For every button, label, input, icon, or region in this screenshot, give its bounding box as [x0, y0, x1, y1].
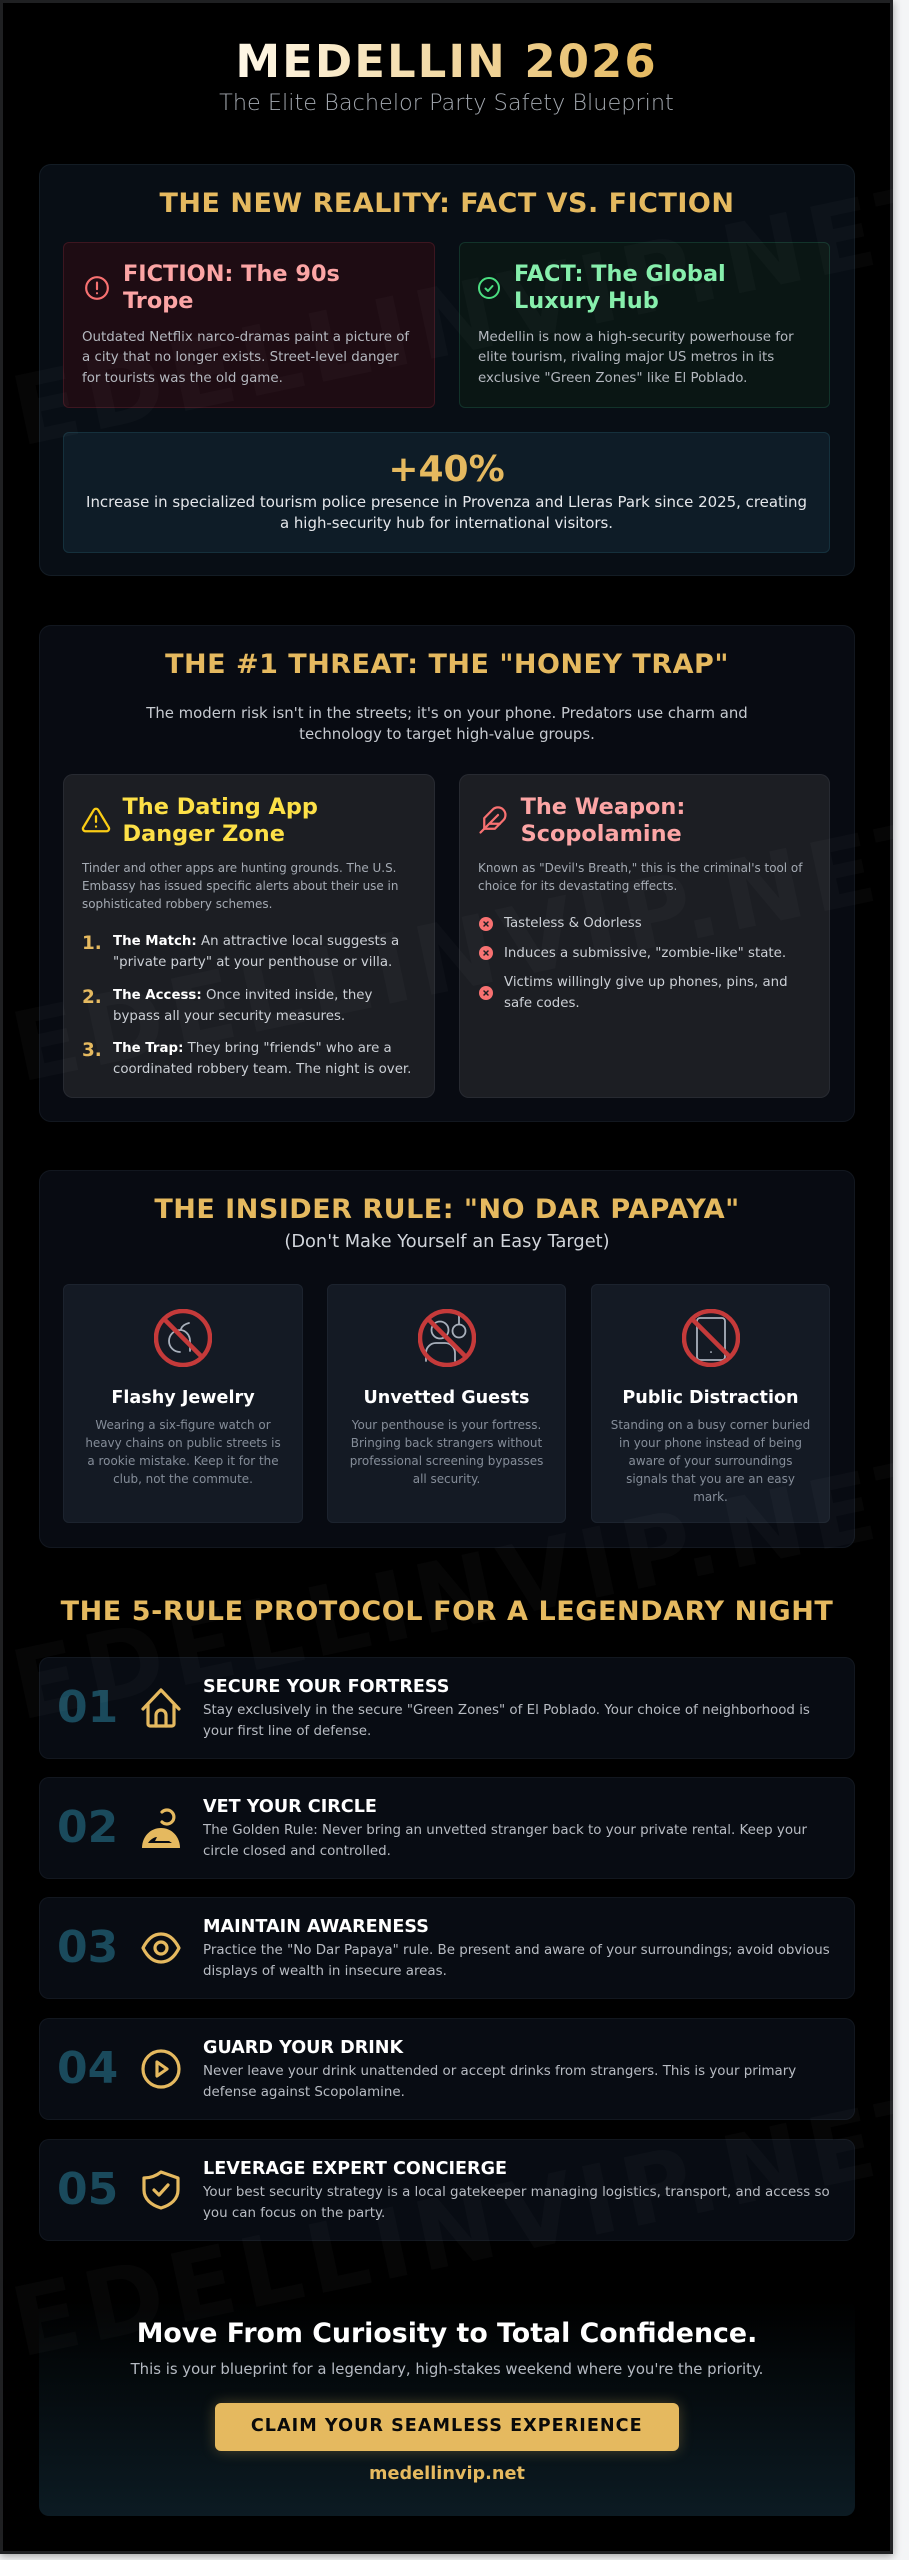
- guests title: Unvetted Guests: [364, 1388, 529, 1408]
- fact heading: [514, 260, 726, 314]
- icon: play circle: [141, 2049, 181, 2089]
- card: scopolamine: [459, 774, 830, 1098]
- fiction text: [82, 330, 410, 386]
- rule 05 text: [203, 2185, 830, 2221]
- distraction text: [611, 1418, 810, 1504]
- icon: person: [142, 1808, 180, 1848]
- card: fact: [459, 242, 830, 408]
- step 1: The Match: An attractive local suggests a: [113, 934, 399, 948]
- panel: no dar papaya: [39, 1170, 855, 1548]
- card: unvetted guests: [327, 1284, 566, 1523]
- rule 01 text: [203, 1703, 810, 1739]
- effect 3: Victims willingly give up phones, pins, and: [504, 975, 788, 990]
- scopolamine text: [478, 861, 803, 893]
- cta button: CLAIM YOUR SEAMLESS EXPERIENCE: [251, 2416, 643, 2436]
- rule 04 text: [203, 2064, 796, 2100]
- stat number: +40%: [388, 448, 505, 490]
- header title: MEDELLIN 2026: [235, 35, 658, 88]
- number 02: 02: [57, 1802, 118, 1853]
- fiction text: a city that no longer exists. Street-level danger: [82, 350, 399, 365]
- fiction text: Outdated Netflix narco-dramas paint a picture of: [82, 330, 409, 345]
- jewelry text: Wearing a six-figure watch or: [95, 1418, 271, 1432]
- rule 03 text: [203, 1943, 830, 1979]
- dating text: [82, 861, 398, 911]
- step 3: coordinated robbery team. The night is over.: [113, 1062, 411, 1077]
- intro text: technology to target high-value groups.: [299, 725, 595, 743]
- effect 3: [479, 975, 788, 1011]
- rule 05 title: LEVERAGE EXPERT CONCIERGE: [203, 2159, 507, 2179]
- step 3: 3.: [82, 1040, 102, 1060]
- website link: medellinvip.net: [369, 2464, 525, 2484]
- scopolamine heading: [520, 794, 685, 847]
- fiction heading: [123, 260, 340, 314]
- fact heading: Luxury Hub: [514, 288, 659, 314]
- distraction text: aware of your surroundings: [629, 1454, 792, 1468]
- rule 03 text: displays of wealth in insecure areas.: [203, 1964, 447, 1979]
- heading: new reality: THE NEW REALITY: FACT VS. FICTION: [160, 188, 734, 218]
- intro text: The modern risk isn't in the streets; it's on your phone. Predators use charm and: [146, 704, 748, 722]
- rule 01: [39, 1657, 855, 1759]
- cta text: This is your blueprint for a legendary, high-stakes weekend where you're the priority.: [131, 2360, 763, 2378]
- dating heading: The Dating App: [122, 794, 318, 820]
- distraction text: in your phone instead of being: [619, 1436, 802, 1450]
- panel: new reality: [39, 164, 855, 576]
- rule 02: [39, 1777, 855, 1879]
- fact heading: FACT: The Global: [514, 260, 726, 286]
- distraction text: Standing on a busy corner buried: [611, 1418, 810, 1432]
- number 05: 05: [57, 2164, 118, 2215]
- jewelry text: [85, 1418, 281, 1486]
- distraction text: signals that you are an easy: [626, 1472, 795, 1486]
- step 1: "private party" at your penthouse or villa.: [113, 955, 392, 970]
- step 2: [82, 986, 372, 1024]
- header subtitle: The Elite Bachelor Party Safety Blueprint: [219, 90, 674, 116]
- heading: protocol: THE 5-RULE PROTOCOL FOR A LEGENDARY NIGHT: [61, 1596, 833, 1627]
- scopolamine text: choice for its devastating effects.: [478, 879, 677, 893]
- card: public distraction: [591, 1284, 830, 1523]
- intro text: [146, 704, 748, 743]
- icon: shield check: [142, 2170, 180, 2210]
- icon: feather: [479, 806, 507, 834]
- jewelry title: Flashy Jewelry: [111, 1388, 255, 1408]
- guests text: professional screening bypasses: [350, 1454, 543, 1468]
- number 04: 04: [57, 2043, 118, 2094]
- number 01: 01: [57, 1682, 118, 1733]
- scopolamine heading: The Weapon:: [521, 794, 685, 820]
- jewelry text: heavy chains on public streets is: [85, 1436, 281, 1450]
- dating heading: Danger Zone: [122, 821, 285, 847]
- step 2: 2.: [82, 986, 102, 1008]
- rule 03: [39, 1897, 855, 1999]
- icon: no guests: [418, 1309, 476, 1367]
- panel: honey trap: [39, 625, 855, 1122]
- rule 01 title: SECURE YOUR FORTRESS: [203, 1677, 449, 1697]
- cta heading: Move From Curiosity to Total Confidence.: [137, 2318, 757, 2349]
- rule 04: [39, 2018, 855, 2120]
- cta button: [214, 2403, 679, 2451]
- rule 04 text: defense against Scopolamine.: [203, 2085, 405, 2100]
- fiction heading: Trope: [123, 288, 193, 314]
- step 1: 1.: [82, 932, 102, 954]
- rule 02 text: The Golden Rule: Never bring an unvetted stranger back to your private rental. Keep your: [203, 1823, 807, 1838]
- number 03: 03: [57, 1922, 118, 1973]
- rule 05 text: you can focus on the party.: [203, 2206, 385, 2221]
- dating text: sophisticated robbery schemes.: [82, 897, 272, 911]
- dating text: Embassy has issued specific alerts about their use in: [82, 879, 398, 893]
- jewelry text: a rookie mistake. Keep it for the: [87, 1454, 279, 1468]
- jewelry text: club, not the commute.: [113, 1472, 253, 1486]
- rule 02 text: circle closed and controlled.: [203, 1844, 391, 1859]
- stat text: a high-security hub for international visitors.: [280, 514, 613, 532]
- dating heading: [122, 794, 318, 847]
- step 2: bypass all your security measures.: [113, 1009, 345, 1024]
- distraction title: Public Distraction: [622, 1388, 799, 1408]
- rule 05: [39, 2139, 855, 2241]
- panel: call to action: [39, 2300, 855, 2516]
- rule 01 text: Stay exclusively in the secure "Green Zones" of El Poblado. Your choice of neighborhood is: [203, 1703, 810, 1718]
- stat text: Increase in specialized tourism police presence in Provenza and Lleras Park since 2025, creating: [86, 493, 807, 511]
- icon: no phone: [682, 1309, 740, 1367]
- icon: alert circle: [85, 276, 109, 300]
- guests text: Bringing back strangers without: [351, 1436, 542, 1450]
- rule 01 text: your first line of defense.: [203, 1724, 371, 1739]
- heading: honey trap: THE #1 THREAT: THE "HONEY TRAP": [165, 649, 729, 680]
- fiction text: for tourists was the old game.: [82, 371, 283, 386]
- icon: warning triangle: [82, 808, 110, 832]
- icon: check circle: [478, 277, 500, 299]
- rule 04 text: Never leave your drink unattended or accept drinks from strangers. This is your primary: [203, 2064, 796, 2079]
- guests text: [350, 1418, 543, 1486]
- rule 04 title: GUARD YOUR DRINK: [203, 2038, 403, 2058]
- step 3: [82, 1040, 411, 1077]
- step 1: [82, 932, 399, 970]
- scopolamine text: Known as "Devil's Breath," this is the criminal's tool of: [478, 861, 802, 875]
- step 3: The Trap: They bring "friends" who are a: [113, 1040, 392, 1056]
- rule 02 text: [202, 1823, 807, 1859]
- icon: no jewelry: [154, 1309, 212, 1367]
- heading: insider rule: THE INSIDER RULE: "NO DAR PAPAYA": [154, 1194, 740, 1225]
- effect 2: Induces a submissive, "zombie-like" state.: [504, 946, 786, 960]
- fact text: elite tourism, rivaling major US metros in its: [478, 350, 774, 365]
- rule 02 title: VET YOUR CIRCLE: [203, 1797, 377, 1817]
- card: fiction: [63, 242, 435, 408]
- fact text: exclusive "Green Zones" like El Poblado.: [478, 371, 747, 386]
- distraction text: mark.: [693, 1490, 728, 1504]
- effect 3: safe codes.: [504, 996, 580, 1011]
- rule 03 text: Practice the "No Dar Papaya" rule. Be present and aware of your surroundings; avoid obvious: [203, 1943, 830, 1958]
- scopolamine heading: Scopolamine: [521, 821, 682, 847]
- guests text: all security.: [413, 1472, 480, 1486]
- rule 05 text: Your best security strategy is a local gatekeeper managing logistics, transport, and access so: [203, 2185, 830, 2200]
- icon: house: [141, 1688, 181, 1728]
- guests text: Your penthouse is your fortress.: [352, 1418, 541, 1432]
- dating text: Tinder and other apps are hunting grounds. The U.S.: [82, 861, 396, 875]
- fact text: [478, 330, 794, 386]
- stat callout: [63, 432, 830, 552]
- effect 1: Tasteless & Odorless: [504, 916, 642, 931]
- rule 03 title: MAINTAIN AWARENESS: [203, 1917, 429, 1937]
- fiction heading: FICTION: The 90s: [123, 260, 340, 286]
- insider subtitle: (Don't Make Yourself an Easy Target): [284, 1231, 610, 1252]
- icon: eye: [141, 1932, 181, 1964]
- card: flashy jewelry: [63, 1284, 303, 1523]
- fact text: Medellin is now a high-security powerhouse for: [478, 330, 794, 345]
- card: dating app: [63, 774, 435, 1098]
- stat text: [86, 493, 807, 532]
- step 2: The Access: Once invited inside, they: [113, 988, 372, 1002]
